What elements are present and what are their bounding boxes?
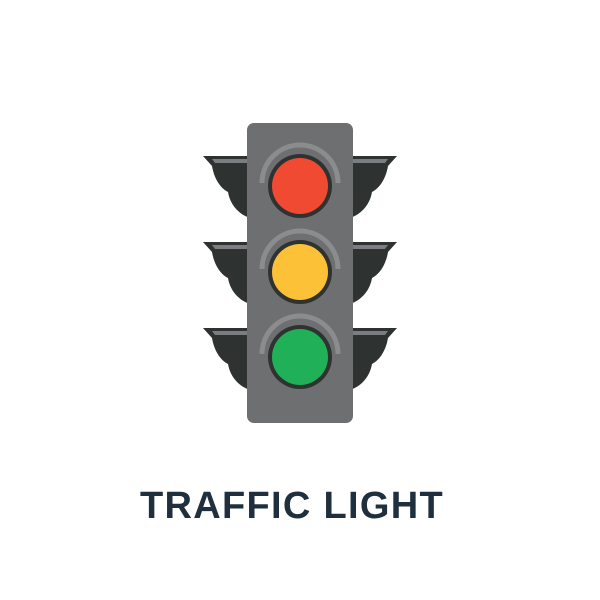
lights bbox=[262, 145, 338, 389]
body bbox=[247, 123, 353, 423]
title: TRAFFIC LIGHT bbox=[140, 485, 444, 527]
wings bbox=[203, 156, 397, 390]
